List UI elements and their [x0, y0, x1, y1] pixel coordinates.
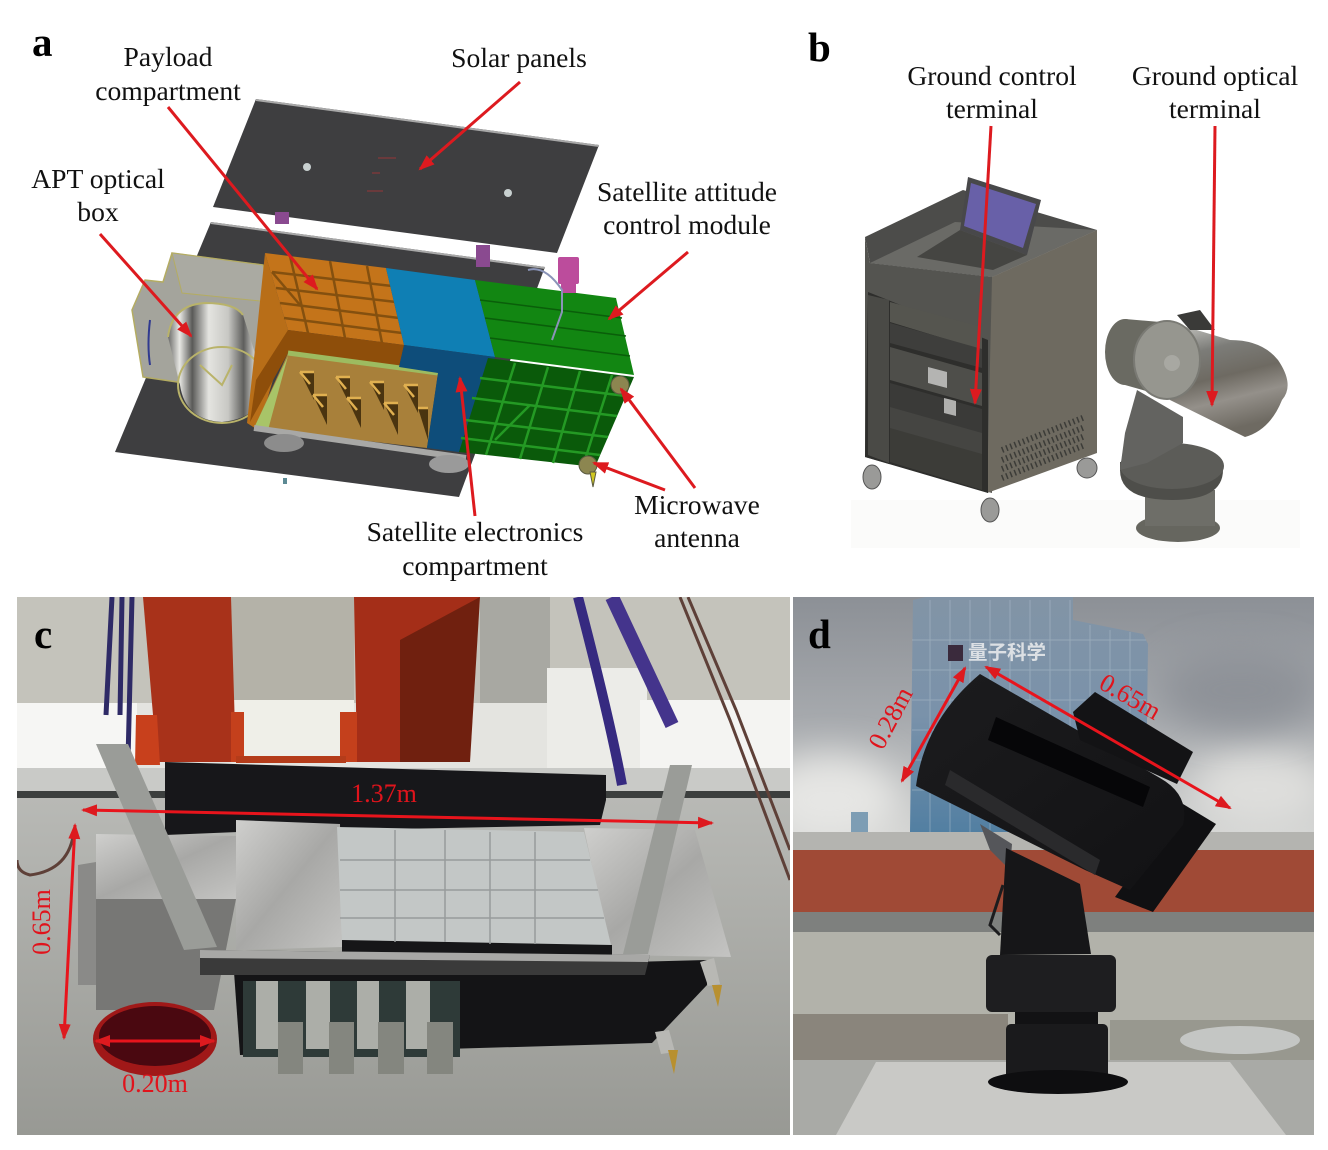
gold antennas [655, 958, 720, 1054]
panel letter b: b [808, 24, 831, 70]
control cabinet [863, 190, 1097, 522]
dimension 0.20m [96, 1041, 214, 1098]
label Payload compartment: Payload [124, 41, 213, 72]
label Satellite electronics compartment: Satellite electronics [367, 516, 583, 547]
panel letter c: c [34, 611, 52, 657]
label Microwave antenna: antenna [654, 522, 740, 553]
panel c: satellite photo [17, 597, 790, 1135]
leader arrows panel b [975, 126, 1215, 405]
dimension 0.20m: 0.20m [122, 1069, 188, 1098]
dimension 1.37m [83, 779, 712, 823]
payload compartment orange [247, 253, 404, 430]
antenna array [243, 981, 460, 1074]
black solar panel [165, 762, 606, 835]
leader arrows panel a [100, 82, 695, 516]
dimension 0.28m [862, 668, 965, 781]
photo background [17, 798, 790, 1135]
dimension 0.65m: 0.65m [1095, 668, 1166, 726]
payload side radiator fins [254, 353, 438, 448]
label Microwave antenna: Microwave [634, 489, 760, 520]
cross bar [200, 950, 650, 975]
attitude control module green [459, 280, 634, 467]
grey payload panel [337, 827, 612, 957]
red aperture disc [93, 1002, 217, 1076]
label Ground optical terminal: terminal [1169, 93, 1261, 124]
label APT optical box: box [77, 196, 119, 227]
label Ground optical terminal: Ground optical [1132, 60, 1298, 91]
panel b: ground terminals [808, 24, 1300, 548]
dimension 0.65m: 0.65m [27, 889, 56, 955]
label Satellite attitude control module: Satellite attitude [597, 176, 777, 207]
telescope [916, 674, 1216, 1094]
label Satellite electronics compartment: compartment [402, 550, 548, 581]
microwave antennas [579, 376, 629, 487]
label Ground control terminal: terminal [946, 93, 1038, 124]
control wiring [528, 269, 562, 340]
office building [910, 597, 1148, 832]
dimension 0.28m: 0.28m [862, 682, 919, 754]
rooftop puddles and slab [793, 1014, 1314, 1135]
dimension 0.65m [27, 825, 75, 1038]
vent grille [1002, 417, 1085, 478]
panel letter a: a [32, 19, 52, 65]
building sign: 量子科学 [968, 641, 1046, 664]
hanging straps [106, 597, 672, 785]
silver foil body [78, 820, 731, 1010]
dimension 1.37m: 1.37m [351, 779, 417, 808]
soft floor tint [851, 500, 1300, 548]
panel a: exploded satellite diagram [31, 19, 777, 581]
brick wall [793, 850, 1314, 912]
distant building [851, 812, 868, 832]
electronics compartment dark blue [399, 345, 495, 452]
laptop [917, 177, 1041, 270]
sky [793, 597, 1314, 832]
label Solar panels: Solar panels [451, 42, 587, 73]
roof floor [793, 932, 1314, 1060]
label Satellite attitude control module: control module [603, 209, 771, 240]
red crane [135, 597, 480, 765]
label APT optical box: APT optical [31, 163, 165, 194]
hinge brackets between panels [275, 212, 490, 267]
panel letter d: d [808, 611, 831, 657]
ceiling and windows [17, 597, 790, 798]
base frame rail with mounts [254, 428, 469, 473]
stone band [793, 912, 1314, 932]
panel d: optical terminal photo [760, 597, 1328, 1135]
blue compartment top [386, 268, 495, 357]
dimension 0.65m [986, 667, 1230, 808]
hanging metal arms [96, 744, 692, 954]
label Payload compartment: compartment [95, 75, 241, 106]
label Ground control terminal: Ground control [907, 60, 1077, 91]
magenta thruster [558, 257, 579, 293]
lower dark body [234, 960, 707, 1055]
ground optical terminal [1105, 310, 1288, 542]
solar panel upper [213, 99, 599, 253]
solar panel lower [115, 222, 545, 497]
brown cables [17, 597, 790, 880]
APT optical box [132, 253, 270, 423]
parapet coping [793, 832, 1314, 850]
